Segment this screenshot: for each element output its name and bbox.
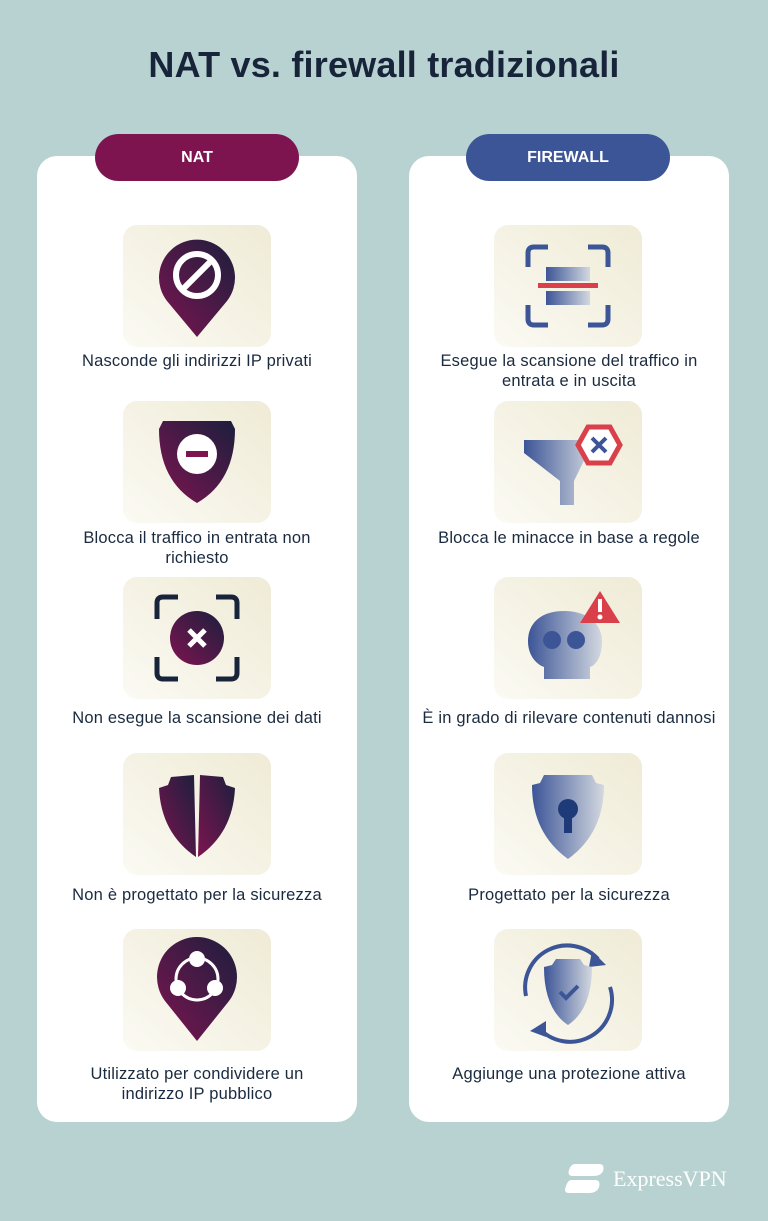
text: FW 1: entrata e in uscita [502, 372, 636, 390]
text: NAT 2: Blocca il traffico in entrata non [83, 529, 311, 547]
icon: shield with refresh arrows [494, 929, 642, 1051]
icon: skull with warning [494, 577, 642, 699]
text: NAT 2 [83, 529, 311, 567]
icon: pin with block [123, 225, 271, 347]
logo: ExpressVPN: ExpressVPN [613, 1166, 727, 1191]
icon: split shield [123, 753, 271, 875]
text: NAT 3: Non esegue la scansione dei dati [72, 709, 322, 727]
text: FW 3: È in grado di rilevare contenuti dannosi [422, 709, 716, 727]
heading: NAT: NAT [181, 149, 213, 166]
heading: NAT [95, 134, 299, 181]
text: NAT 5: indirizzo IP pubblico [122, 1085, 272, 1103]
text: NAT 1: Nasconde gli indirizzi IP privati [82, 352, 312, 370]
icon: funnel with x [494, 401, 642, 523]
panel: firewall [409, 156, 729, 1122]
heading: FIREWALL [466, 134, 670, 181]
text: NAT 2: richiesto [165, 549, 229, 567]
text: FW 2: Blocca le minacce in base a regole [438, 529, 700, 547]
icon: scan with x [123, 577, 271, 699]
text: NAT 5 [90, 1065, 304, 1103]
icon: shield with lock [494, 753, 642, 875]
icon: shield minus [123, 401, 271, 523]
text: NAT 5: Utilizzato per condividere un [90, 1065, 304, 1083]
text: FW 5: Aggiunge una protezione attiva [452, 1065, 686, 1083]
logo: ExpressVPN [565, 1164, 727, 1193]
icon: scan [494, 225, 642, 347]
text: NAT 4: Non è progettato per la sicurezza [72, 886, 322, 904]
text: FW 4: Progettato per la sicurezza [468, 886, 670, 904]
heading: FIREWALL: FIREWALL [527, 149, 609, 166]
icon: pin with share nodes [123, 929, 271, 1051]
text: FW 1: Esegue la scansione del traffico in [440, 352, 698, 370]
text: FW 1 [440, 352, 698, 390]
title: NAT vs. firewall tradizionali [148, 44, 620, 85]
panel: NAT [37, 156, 357, 1122]
